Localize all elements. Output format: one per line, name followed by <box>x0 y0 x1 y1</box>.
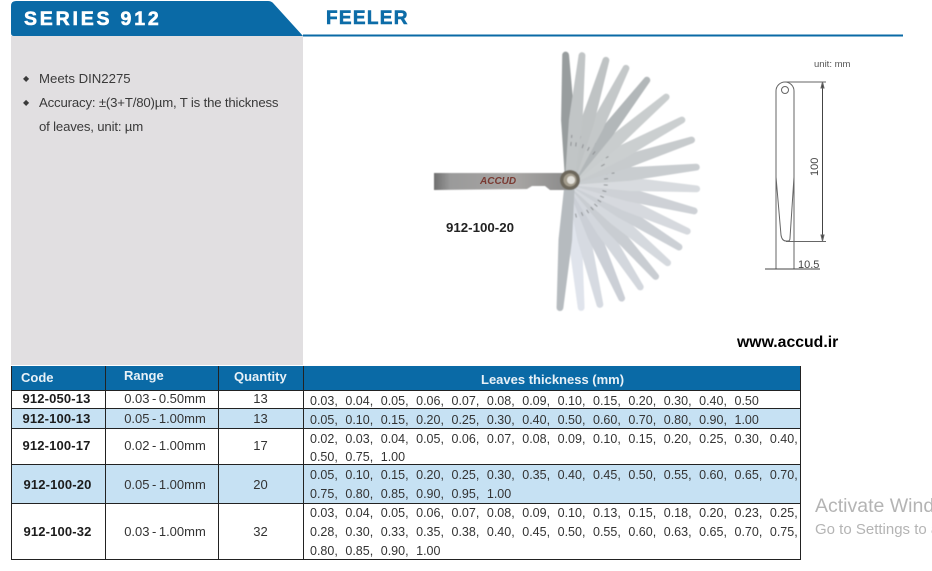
row: 912-050-13: 912-050-13 <box>22 391 90 406</box>
feature list: ◆ <box>23 98 29 107</box>
leaves: 912-100-17: 0.50, 0.75, 1.00 <box>310 450 405 464</box>
leaves: 912-100-17 <box>310 432 798 464</box>
panel: sidebar <box>11 36 303 365</box>
table header: Quantity <box>234 369 287 384</box>
row: 912-100-13: 13 <box>253 411 268 426</box>
leaves: 912-100-32: 0.28, 0.30, 0.33, 0.35, 0.38, 0.40, 0.45, 0.50, 0.55, 0.60, 0.63, 0.65, 0.70, 0.75, <box>310 525 798 539</box>
row: 912-050-13: 0.03 - 0.50mm <box>124 391 206 406</box>
leaves: 912-100-13: 0.05, 0.10, 0.15, 0.20, 0.25, 0.30, 0.40, 0.50, 0.60, 0.70, 0.80, 0.90, 1.00 <box>310 413 759 427</box>
row: 912-100-20 <box>24 477 268 492</box>
row: 912-100-17 <box>22 438 268 453</box>
feature list: ◆ <box>23 74 29 83</box>
row: 912-100-13 <box>22 411 268 426</box>
row: 912-100-20: 0.05 - 1.00mm <box>124 477 206 492</box>
feature list: Meets DIN2275 <box>39 71 131 86</box>
dimension drawing: unit: mm <box>814 59 851 70</box>
row: 912-100-13: 0.05 - 1.00mm <box>124 411 206 426</box>
leaves: 912-100-20: 0.05, 0.10, 0.15, 0.20, 0.25, 0.30, 0.35, 0.40, 0.45, 0.50, 0.55, 0.60, 0.65, 0.70, <box>310 468 798 482</box>
watermark: activate windows <box>815 495 932 538</box>
website url: www.accud.ir <box>737 334 838 351</box>
leaves: 912-100-20 <box>310 468 798 501</box>
row: 912-100-17: 0.02 - 1.00mm <box>124 438 206 453</box>
feature list: Accuracy: ±(3+T/80)µm, T is the thickness <box>39 95 278 110</box>
row highlight: 912-100-13 <box>11 409 800 428</box>
leaves: 912-100-32: 0.03, 0.04, 0.05, 0.06, 0.07, 0.08, 0.09, 0.10, 0.13, 0.15, 0.18, 0.20, 0.23, 0.25, <box>310 506 798 520</box>
row: 912-100-32 <box>24 524 268 539</box>
leaves: 912-100-20: 0.75, 0.80, 0.85, 0.90, 0.95, 1.00 <box>310 487 511 501</box>
row highlight: 912-100-20 <box>11 465 800 503</box>
row: 912-100-32: 912-100-32 <box>24 524 92 539</box>
row: 912-100-20: 912-100-20 <box>24 477 92 492</box>
product photo: feeler gauge fan <box>433 51 700 312</box>
leaves: 912-100-32 <box>310 506 798 558</box>
leaves: 912-100-17: 0.02, 0.03, 0.04, 0.05, 0.06, 0.07, 0.08, 0.09, 0.10, 0.15, 0.20, 0.25, 0.30, 0.40, <box>310 432 798 446</box>
feature list: of leaves, unit: µm <box>39 119 143 134</box>
product photo: feeler gauge fan: ACCUD <box>479 176 516 187</box>
title: series: SERIES 912 <box>24 8 161 30</box>
dimension drawing: 10.5 <box>798 259 819 271</box>
table header: Leaves thickness (mm) <box>481 372 624 387</box>
row: 912-100-13: 912-100-13 <box>22 411 90 426</box>
title: feeler: FEELER <box>326 8 409 29</box>
table header <box>11 366 800 390</box>
table header: Code <box>21 370 54 385</box>
row: 912-100-17: 17 <box>253 438 268 453</box>
feature list <box>23 71 278 134</box>
dimension drawing <box>765 59 851 271</box>
row: 912-100-32: 0.03 - 1.00mm <box>124 524 206 539</box>
row: 912-050-13: 13 <box>253 391 268 406</box>
header bar <box>11 1 903 36</box>
table header: Range <box>124 368 164 383</box>
row: 912-100-20: 20 <box>253 477 268 492</box>
row: 912-050-13 <box>22 391 268 406</box>
dimension drawing: 100 <box>809 158 821 176</box>
leaves: 912-100-32: 0.80, 0.85, 0.90, 1.00 <box>310 544 440 558</box>
row: 912-100-32: 32 <box>253 524 268 539</box>
leaves: 912-050-13: 0.03, 0.04, 0.05, 0.06, 0.07, 0.08, 0.09, 0.10, 0.15, 0.20, 0.30, 0.40, 0.50 <box>310 394 759 408</box>
row: 912-100-17: 912-100-17 <box>22 438 90 453</box>
model label: 912-100-20 <box>446 220 514 235</box>
